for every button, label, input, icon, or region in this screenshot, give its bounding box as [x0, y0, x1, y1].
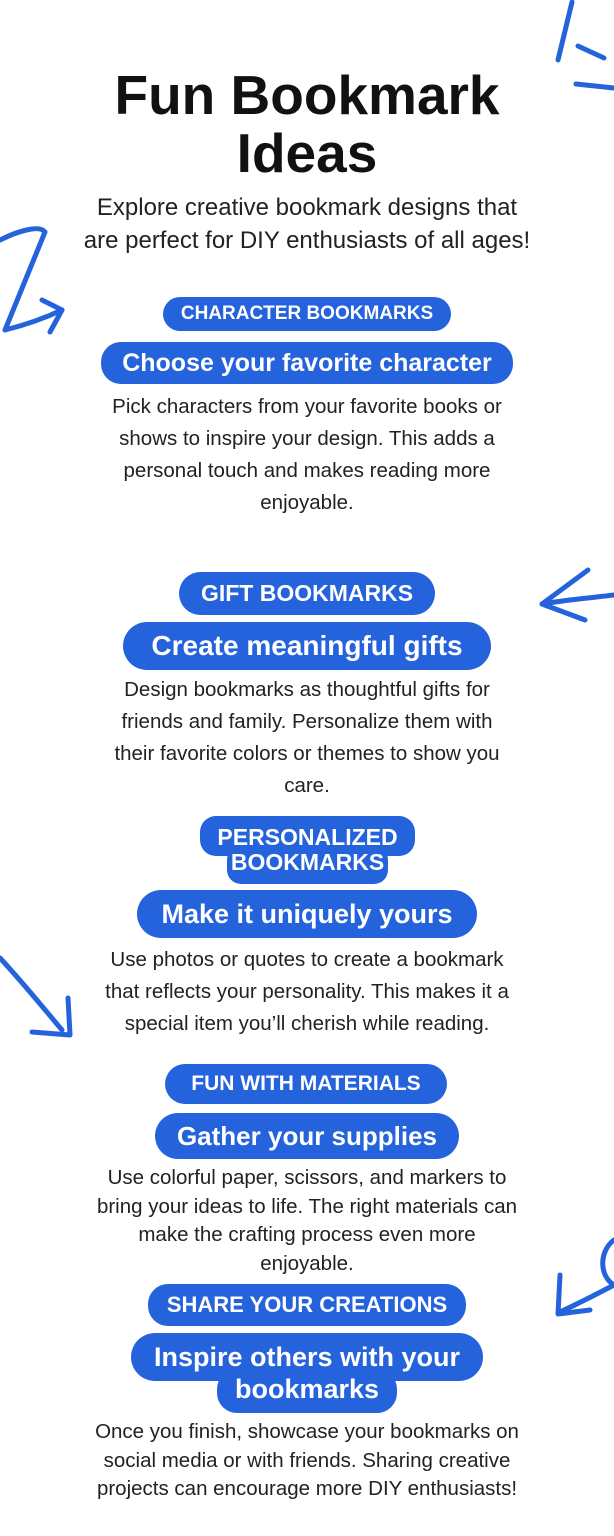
body text: enjoyable.	[260, 1252, 354, 1274]
body text: Use photos or quotes to create a bookmark	[110, 948, 504, 971]
heading pill: bookmarks	[235, 1374, 379, 1404]
body text: that reflects your personality. This makes it a	[105, 980, 509, 1003]
section: personalized bookmarks	[105, 816, 509, 1035]
heading pill: Inspire others with your	[154, 1342, 460, 1372]
body text: Once you finish, showcase your bookmarks on	[95, 1420, 519, 1443]
body text: Use colorful paper, scissors, and markers to	[108, 1166, 506, 1189]
heading pill	[101, 342, 513, 384]
body text: their favorite colors or themes to show you	[114, 742, 500, 765]
heading pill: Make it uniquely yours	[161, 899, 453, 929]
body text: projects can encourage more DIY enthusiasts!	[97, 1477, 517, 1500]
body text: social media or with friends. Sharing creative	[104, 1448, 510, 1472]
subtitle	[84, 194, 530, 254]
section: gift bookmarks	[114, 572, 500, 797]
body text: Design bookmarks as thoughtful gifts for	[124, 678, 490, 701]
title: Fun Bookmark	[114, 64, 500, 126]
tag pill	[148, 1284, 466, 1326]
tag pill: BOOKMARKS	[231, 849, 384, 875]
subtitle: are perfect for DIY enthusiasts of all ages!	[84, 227, 530, 254]
heading pill	[155, 1113, 459, 1159]
body text: shows to inspire your design. This adds a	[119, 427, 495, 450]
tag pill: GIFT BOOKMARKS	[201, 580, 413, 606]
body text	[112, 395, 502, 514]
section: character bookmarks	[101, 297, 513, 514]
section: fun with materials	[97, 1064, 517, 1274]
heading pill	[137, 890, 477, 938]
body text	[95, 1420, 519, 1500]
body text: care.	[284, 774, 330, 797]
tag pill: SHARE YOUR CREATIONS	[167, 1292, 447, 1317]
tag pill	[179, 572, 435, 615]
body text: bring your ideas to life. The right materials can	[97, 1194, 517, 1218]
body text: enjoyable.	[260, 491, 354, 514]
body text	[105, 948, 509, 1035]
heading pill	[131, 1333, 483, 1413]
tag pill	[200, 816, 415, 884]
body text: special item you’ll cherish while reading.	[125, 1012, 489, 1035]
icon: left arrow pointing down-right	[0, 958, 70, 1035]
subtitle: Explore creative bookmark designs that	[97, 194, 517, 221]
body text: Pick characters from your favorite books or	[112, 395, 502, 418]
tag pill: CHARACTER BOOKMARKS	[181, 303, 433, 324]
body text	[114, 678, 500, 797]
tag pill: PERSONALIZED	[217, 824, 398, 850]
body text: make the crafting process even more	[138, 1223, 476, 1246]
section: share your creations	[95, 1284, 519, 1500]
heading pill: Gather your supplies	[177, 1121, 437, 1151]
icon: right arrow pointing left	[542, 570, 614, 620]
title	[114, 64, 500, 184]
heading pill: Create meaningful gifts	[151, 630, 463, 661]
heading pill	[123, 622, 491, 670]
tag pill: FUN WITH MATERIALS	[191, 1072, 421, 1095]
title: Ideas	[237, 122, 377, 184]
body text: personal touch and makes reading more	[124, 459, 490, 482]
icon: bottom right curved arrow	[558, 1240, 614, 1314]
icon: top right strokes	[558, 2, 614, 88]
tag pill	[163, 297, 451, 331]
tag pill	[165, 1064, 447, 1104]
heading pill: Choose your favorite character	[122, 349, 492, 377]
icon: left zigzag arrow	[0, 229, 62, 332]
body text: friends and family. Personalize them with	[121, 710, 493, 733]
body text	[97, 1166, 517, 1274]
